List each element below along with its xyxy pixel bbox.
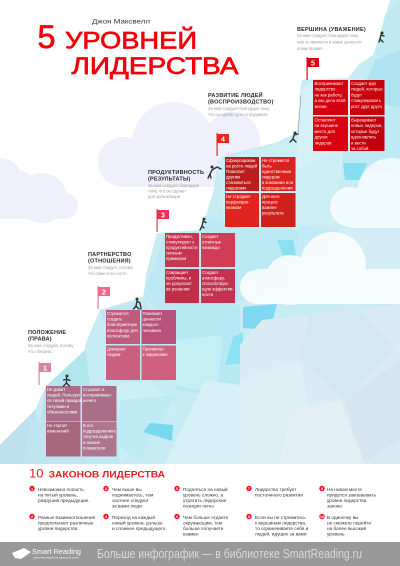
level 4 cells: становиться — [226, 180, 251, 185]
law texts column 3: Подняться на новый — [183, 486, 228, 492]
law bullet numbers: 2 — [31, 515, 33, 519]
law texts column 4 — [255, 487, 309, 536]
law texts column 4: то ограничиваете себя и — [255, 526, 309, 531]
level 4 cells: подразделении — [262, 186, 293, 190]
level 2 cells: каждого — [142, 322, 159, 327]
level 3 cells: их решения — [166, 286, 190, 292]
level 2 cells: человека — [142, 328, 162, 333]
level 1 cells: обязанностями — [47, 409, 78, 414]
level 4 heading: (ВОСПРОИЗВОДСТВО) — [208, 100, 274, 106]
level 2 cells: благоприятную — [107, 322, 138, 327]
level 1 heading: ПОЛОЖЕНИЕ — [28, 330, 66, 336]
level 5 cells: вдохновлять — [351, 135, 377, 140]
lavender clouds background — [0, 102, 273, 223]
level 5 cells: не как работу, — [314, 92, 342, 97]
level 5 cells: место для — [314, 129, 336, 134]
brand name: цепочка идей на каждый день — [33, 556, 80, 560]
level 4 cells: низмом — [226, 205, 241, 210]
level 1 heading: что обязаны — [28, 349, 52, 354]
law texts column 4: Если вы не стремитесь — [255, 515, 306, 520]
title — [38, 19, 238, 80]
level 4 cells: лидером — [262, 174, 280, 180]
law texts column 3: взамен — [183, 532, 199, 536]
law bullet numbers: 5 — [176, 487, 178, 491]
law texts column 5: В одиночку вы — [327, 515, 359, 520]
level 4 cells: Не страдает — [226, 194, 251, 199]
level 2 heading: (ОТНОШЕНИЯ) — [88, 258, 131, 264]
law texts column 3: утратить лидерские — [183, 498, 227, 503]
law bullet numbers: 4 — [105, 515, 107, 519]
level 3 cells: стимулирует к — [166, 240, 194, 244]
level 3 cells: Продуктивен, — [166, 234, 193, 239]
level 3 cells: команды — [202, 245, 220, 250]
level 3 cells: Сокращает — [166, 270, 188, 275]
level 5 cells: за собой — [351, 146, 369, 151]
level 3 cells: способствую- — [202, 281, 230, 286]
level 1 heading: (ПРАВА) — [28, 336, 52, 342]
level 4 heading: что он сделал для сотрудников — [208, 112, 267, 117]
law bullet numbers: 6 — [176, 515, 178, 519]
level 3 cells: Создает — [202, 270, 218, 275]
author: Джон Максвелл — [92, 18, 150, 26]
law bullet numbers: 3 — [105, 487, 107, 491]
level 1 cells: Не давит — [47, 387, 65, 392]
law texts column 1: предполагают различные — [38, 520, 94, 526]
law texts column 1: уровни лидерства — [38, 526, 78, 531]
law texts column 2: поднимаетесь, тем — [112, 492, 153, 498]
level 1 heading — [28, 330, 74, 354]
level 5 heading: ВЕРШИНА (УВАЖЕНИЕ) — [297, 27, 366, 33]
level 3 cells: продуктивности — [166, 245, 198, 250]
level 2 cells: Доверяет — [107, 346, 126, 352]
law texts column 3: уровень сложно, а — [183, 492, 224, 498]
flag 3 — [156, 209, 169, 232]
level 5 cells: Выращивает — [351, 118, 377, 122]
title: ЛИДЕРСТВА — [72, 53, 238, 80]
level 4 cells: результата — [262, 210, 284, 216]
law bullet numbers: 1 — [31, 487, 33, 491]
white clouds — [240, 232, 400, 305]
level 1 cells: показатели — [83, 445, 106, 450]
level 4 cells: важнее — [262, 205, 277, 210]
level 5 cells: людей, которые — [351, 87, 383, 92]
level 4 cells: лидерами — [226, 186, 247, 190]
law texts column 1: на пятый уровень, — [38, 492, 78, 498]
law texts column 2: охотнее следуют — [112, 498, 150, 503]
level 2 cells: Проявляет — [142, 346, 164, 352]
level 5 heading: кем он является и какие ценности — [297, 40, 362, 44]
level 4 cells — [225, 157, 296, 227]
level 5 cells: стимулировать — [351, 98, 382, 103]
law texts column 5: на более высокий — [327, 525, 366, 531]
law texts column 1: разрушив предыдущие. — [38, 498, 90, 503]
level 2 cells: коллектива — [107, 333, 130, 338]
brand name: Smart Reading — [32, 547, 81, 556]
level 4 cells: Не стремится — [262, 158, 290, 163]
level 3 cells — [165, 233, 235, 303]
law texts column 3: Чем больше отдаете — [183, 515, 229, 520]
law texts column 2: за вами люди — [112, 504, 142, 508]
level 3 heading: ПРОДУКТИВНОСТЬ — [148, 170, 204, 176]
level 5 cells: а как дело всей — [314, 98, 346, 103]
level 3 cells: не допускает — [166, 281, 192, 286]
level 4 cells: единственным — [262, 169, 291, 174]
level 1 cells: ничего — [83, 398, 97, 403]
level 5 cells: других — [314, 135, 328, 140]
laws heading: 10 ЗАКОНОВ ЛИДЕРСТВА — [29, 466, 165, 480]
level 5 cells: которые будут — [351, 129, 380, 134]
level 3 heading — [148, 170, 204, 199]
flag 4: 4 — [221, 136, 225, 144]
level 4 cells: процесс — [262, 200, 279, 204]
law texts column 5 — [327, 487, 377, 536]
level 4 cells: перфекцио- — [226, 200, 250, 204]
law texts column 4: к вершинам лидерства, — [255, 520, 306, 526]
level 4 heading: РАЗВИТИЕ ЛЮДЕЙ — [208, 91, 263, 99]
level 2 cells: к окружению — [142, 352, 168, 357]
law texts column 3: позиции легко — [183, 504, 214, 508]
law texts column 5: придется завоевывать — [327, 492, 377, 498]
law texts column 5: не сможете перейти — [327, 520, 371, 526]
level 3 cells: щую эффектив- — [202, 286, 234, 292]
level 3 heading: для организации — [148, 194, 180, 199]
level 4 heading — [208, 91, 274, 117]
level 3 heading: (РЕЗУЛЬТАТЫ) — [148, 176, 191, 182]
law texts column 2: и сложнее предыдущего — [112, 526, 166, 531]
level 2 heading — [88, 252, 134, 276]
level 1 cells: изменений — [47, 429, 69, 434]
level 2 cells: Стремится — [107, 311, 129, 316]
level 2 cells: создать — [107, 317, 123, 322]
level 5 cells — [313, 80, 384, 151]
level 5 cells: будут — [351, 92, 362, 97]
level 5 cells: Оставляет — [314, 118, 336, 122]
flag 4 — [216, 133, 229, 156]
flag 2: 2 — [102, 290, 106, 296]
level 5 heading: олицетворяет — [297, 46, 323, 51]
flag 1: 1 — [43, 366, 47, 372]
level 3 cells: проблемы, и — [166, 276, 192, 280]
flag 2 — [98, 286, 110, 309]
level 5 cells: новых лидеров, — [351, 123, 383, 128]
level 2 heading: ПАРТНЕРСТВО — [88, 252, 132, 258]
level 3 cells: ности — [202, 292, 214, 297]
level 3 cells: примером — [166, 256, 186, 261]
level 1 cells: воспринимает — [83, 393, 111, 398]
law texts column 2: новый уровень дольше — [112, 520, 163, 526]
level 1 cells: титулами и — [47, 404, 70, 409]
law texts column 5: заново — [327, 504, 342, 508]
climber icons — [64, 32, 384, 386]
level 1 cells: людей. Пользует- — [47, 393, 83, 398]
law texts column 1: Невозможно попасть — [38, 487, 84, 492]
title: УРОВНЕЙ — [65, 26, 197, 54]
level 2 cells — [106, 310, 176, 380]
level 2 heading: что сами этого хотят — [88, 271, 127, 276]
level 1 cells: текучка кадров — [83, 434, 114, 439]
law bullet numbers: 10 — [320, 515, 324, 519]
law bullet numbers: 8 — [248, 515, 250, 519]
law texts column 3 — [183, 486, 229, 536]
law texts column 2: Переход на каждый — [112, 514, 155, 520]
level 5 cells: лидеров — [314, 140, 332, 145]
level 4 cells: Помогает — [226, 169, 245, 174]
law bullet numbers — [31, 487, 324, 519]
level 2 heading: За ним следует, потому — [88, 265, 134, 270]
law texts column 4: постоянного развития — [255, 492, 303, 498]
level 3 cells: отличные — [202, 240, 222, 244]
law texts column 5: уровни лидерства — [327, 498, 367, 503]
level 5 cells: на вершине — [314, 123, 339, 128]
level 1 cells: подразделениях — [83, 429, 116, 434]
level 1 cells: Не терпит — [47, 423, 67, 428]
level 5 heading: За ним следуют благодаря тому, — [297, 33, 359, 38]
law texts column 2: Чем выше вы — [112, 487, 142, 492]
level 2 cells: атмосферу для — [107, 328, 138, 333]
flag 5 — [306, 57, 319, 80]
law texts column 5: На новом месте — [327, 487, 362, 492]
law texts column 5: уровень — [327, 532, 345, 536]
law bullet numbers: 9 — [321, 487, 323, 491]
level 2 cells: людям — [107, 352, 120, 357]
level 5 cells: Воспринимает — [314, 81, 343, 86]
level 4 cells: Для него — [262, 194, 280, 199]
level 3 heading: тому, что он сделал — [148, 188, 186, 194]
level 1 cells: ся своей правдой, — [47, 398, 83, 403]
law texts column 4: Лидерство требует — [255, 487, 297, 492]
law bullet numbers: 7 — [248, 487, 250, 491]
law texts column 1: Разные взаимоотношения — [38, 515, 96, 520]
law texts column 3: больше получаете — [183, 526, 224, 531]
icon: book logo — [12, 548, 31, 559]
flag 5: 5 — [311, 60, 315, 68]
law texts column 1 — [38, 487, 96, 531]
level 4 cells: другим — [226, 174, 240, 180]
level 5 cells: и вести — [351, 140, 366, 145]
level 1 cells: и низкие — [83, 440, 101, 445]
level 5 cells: лидерство — [314, 87, 336, 92]
level 5 cells: рост друг друга — [351, 104, 382, 109]
level 5 heading — [297, 27, 366, 51]
level 1 cells: Слушает и — [83, 387, 105, 392]
upper white cloud — [330, 158, 400, 228]
flag 3: 3 — [161, 212, 165, 220]
level 1 heading: За ним следуют, потому — [28, 343, 74, 348]
level 1 cells: В его — [83, 423, 94, 428]
title: 5 — [38, 19, 56, 55]
level 4 cells: быть — [262, 164, 273, 168]
level 3 cells: личным — [166, 250, 182, 256]
level 2 cells: ценности — [142, 317, 162, 322]
flag 1 — [38, 362, 51, 385]
level 1 cells — [46, 386, 116, 456]
level 4 cells: в компании или — [262, 180, 294, 185]
level 3 heading: За ним следуют благодаря — [148, 183, 199, 188]
level 3 cells: Создает — [202, 234, 218, 239]
level 5 cells: Создает круг — [351, 81, 377, 86]
level 4 heading: За ним следуют благодаря тому, — [208, 106, 270, 111]
law texts column 4: людей, идущих за вами — [255, 530, 307, 536]
law bullets — [29, 486, 325, 519]
level 2 cells: Понимает — [142, 311, 162, 316]
level 4 cells: Сфокусирован — [226, 158, 256, 163]
footer bar — [0, 542, 400, 566]
law texts column 2 — [112, 487, 166, 531]
level 4 cells: на росте людей — [226, 164, 258, 168]
level 5 cells: жизни — [314, 104, 327, 109]
level 3 cells: атмосферу, — [202, 276, 225, 280]
laws panel — [0, 464, 400, 542]
law texts column 3: окружающим, тем — [183, 520, 222, 526]
